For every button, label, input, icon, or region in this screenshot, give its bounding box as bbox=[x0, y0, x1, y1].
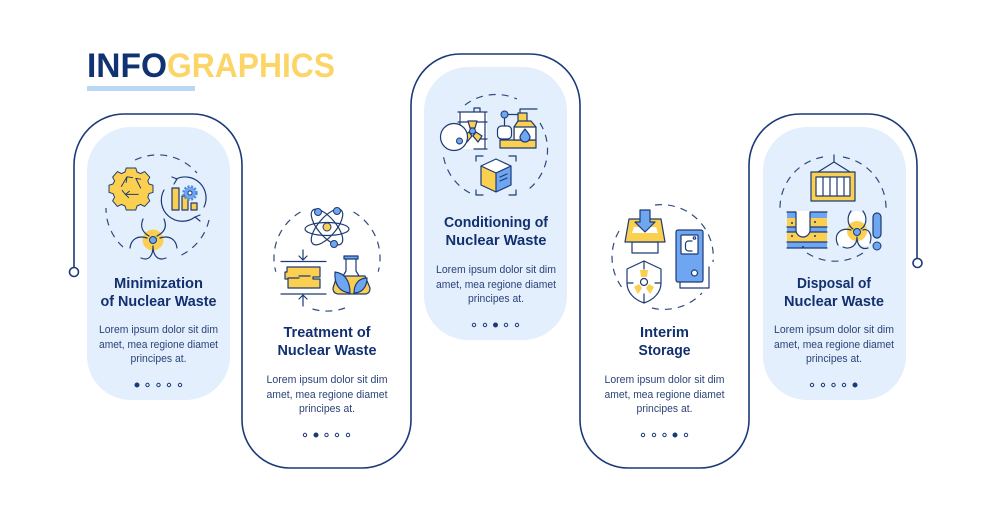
pagination dots bbox=[472, 323, 519, 327]
icon: biohazard warning bbox=[836, 211, 881, 250]
icon: barrel and disc bbox=[440, 108, 487, 150]
heading bbox=[638, 325, 690, 359]
heading: Interim bbox=[640, 325, 689, 341]
icon: compressed blocks bbox=[281, 250, 326, 306]
body text: amet, mea regione diamet bbox=[436, 279, 556, 291]
heading: Treatment of bbox=[284, 325, 371, 341]
title: GRAPHICS bbox=[167, 47, 335, 85]
heading bbox=[784, 276, 884, 310]
body text: principes at. bbox=[806, 353, 862, 365]
panel: treatment bbox=[266, 204, 388, 437]
body text: principes at. bbox=[299, 403, 355, 415]
title underline bbox=[87, 86, 195, 91]
body text: amet, mea regione diamet bbox=[774, 339, 894, 351]
panel: minimization bbox=[87, 127, 230, 400]
body text: principes at. bbox=[468, 293, 524, 305]
heading: Nuclear Waste bbox=[446, 233, 546, 249]
body text: amet, mea regione diamet bbox=[604, 389, 724, 401]
heading bbox=[278, 325, 376, 359]
panel: conditioning bbox=[424, 67, 567, 340]
icon: thermostat device bbox=[676, 230, 709, 288]
body text bbox=[436, 264, 556, 305]
pagination dots bbox=[641, 433, 688, 437]
heading: Storage bbox=[638, 343, 690, 359]
icon: biohazard bbox=[130, 219, 177, 259]
body text: Lorem ipsum dolor sit dim bbox=[99, 324, 218, 336]
end node bbox=[913, 258, 922, 268]
heading: Minimization bbox=[114, 276, 203, 292]
body text: principes at. bbox=[636, 403, 692, 415]
body text: Lorem ipsum dolor sit dim bbox=[266, 374, 388, 386]
heading bbox=[444, 215, 548, 249]
body text: amet, mea regione diamet bbox=[99, 339, 218, 351]
dashed ring bbox=[106, 155, 209, 257]
icon: recycling gear bbox=[109, 168, 153, 210]
icon: radiation shield bbox=[627, 261, 661, 303]
body text bbox=[266, 374, 388, 415]
connecting outline bbox=[74, 54, 917, 468]
heading: of Nuclear Waste bbox=[100, 294, 216, 310]
pagination dots bbox=[303, 433, 350, 437]
heading: Disposal of bbox=[797, 276, 871, 292]
icon: chart in cycle bbox=[161, 177, 206, 221]
pagination dots bbox=[810, 383, 857, 387]
icon: atom bbox=[305, 204, 349, 250]
panel background bbox=[87, 127, 230, 400]
body text: Lorem ipsum dolor sit dim bbox=[436, 264, 556, 276]
body text bbox=[774, 324, 894, 365]
heading: Nuclear Waste bbox=[784, 294, 884, 310]
icon: cube in frame bbox=[476, 156, 516, 195]
panel background bbox=[424, 67, 567, 340]
dashed ring bbox=[443, 94, 548, 193]
body text: Lorem ipsum dolor sit dim bbox=[604, 374, 725, 386]
icon: hanging container bbox=[811, 155, 855, 201]
body text: Lorem ipsum dolor sit dim bbox=[774, 324, 894, 336]
body text bbox=[604, 374, 725, 415]
icon: box with arrow bbox=[625, 210, 665, 253]
start node bbox=[70, 268, 78, 276]
heading: Conditioning of bbox=[444, 215, 548, 231]
panel: interim storage bbox=[604, 205, 725, 437]
icon: geological repository bbox=[787, 211, 827, 248]
body text bbox=[99, 324, 218, 365]
panel: disposal bbox=[763, 127, 906, 400]
body text: principes at. bbox=[130, 353, 186, 365]
dashed ring bbox=[780, 157, 886, 261]
pagination dots bbox=[135, 383, 182, 387]
icon: flask with leaves bbox=[333, 256, 370, 294]
body text: amet, mea regione diamet bbox=[266, 389, 388, 401]
title: INFO bbox=[87, 47, 167, 85]
heading bbox=[100, 276, 216, 310]
panel background bbox=[763, 127, 906, 400]
dashed ring bbox=[274, 212, 380, 311]
heading: Nuclear Waste bbox=[278, 343, 376, 359]
icon: processing bottle bbox=[498, 109, 537, 148]
title bbox=[87, 47, 335, 85]
dashed ring bbox=[612, 205, 713, 309]
